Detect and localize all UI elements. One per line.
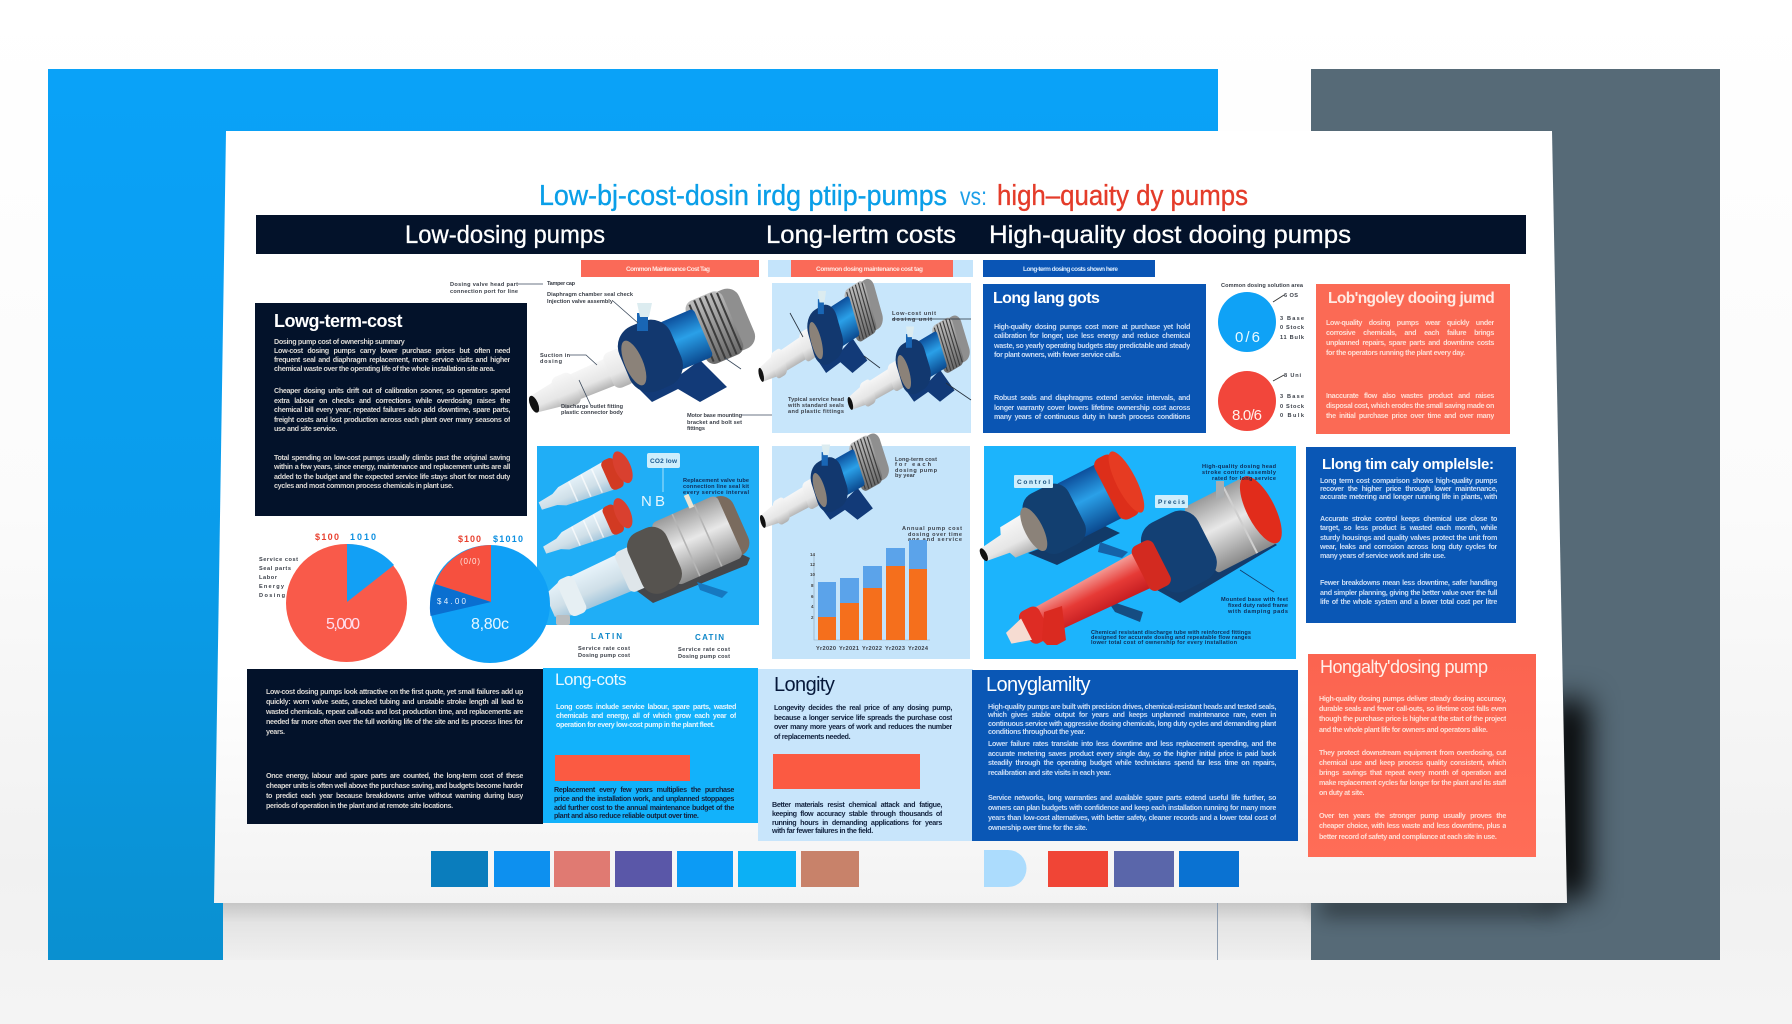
labels under silver pump panel: CATIN (695, 633, 724, 642)
paragraph: Low-quality dosing pumps wear quickly under corrosive chemicals, and each failure brings unplanned repairs, spare parts and downtime costs for the operators running the plant every day. (1326, 318, 1494, 357)
illustration: glass nozzles and silver pump panel: NB (641, 493, 665, 510)
paragraph: Cheaper dosing units drift out of calibration sooner, so operators spend extra labour on checks and corrections while overdosing raises the chemical bill every year; repeated failures also add downtime, spare parts, freight costs and lost production across each plant over many seasons of use and site service. (274, 386, 510, 433)
paragraph: Low-cost dosing pumps look attractive on the first quote, yet small failures add up quickly: worn valve seats, cracked tubing and unstable stroke length all lead to wasted chemicals, repeat call-outs and lost production time, and replacements are needed far more often over the full working life of the site and its process lines for years. (266, 687, 523, 736)
silver pump base (633, 552, 750, 603)
illustration: low-cost pump with callouts (450, 281, 772, 439)
illustration: big high-quality pump panel: Control (1017, 479, 1050, 486)
illustration: glass nozzles and silver pump panel: every service interval (683, 490, 749, 496)
silver pump leg (697, 582, 728, 598)
bar chart: 2 (811, 615, 814, 620)
paragraph: High-quality dosing pumps cost more at purchase yet hold calibration for longer, use less energy and reduce chemical waste, so yearly operating budgets stay predictable and steady for plant owners, with fewer service calls. (994, 322, 1190, 359)
title: high-quality part: high–quaity dy pumps (997, 180, 1248, 212)
labels under silver pump panel: LATIN (591, 632, 622, 641)
paragraph: Over ten years the stronger pump usually proves the cheaper choice, with less waste and less downtime, plus a better record of safety and compliance at each site in use. (1319, 811, 1506, 841)
bar chart: 6 (811, 594, 814, 599)
illustration: glass nozzles and silver pump panel: Replacement valve tube (683, 478, 749, 484)
paragraph: Better materials resist chemical attack and fatigue, keeping flow accuracy stable through thousands of running hours in demanding applications for years with far fewer failures in the field. (772, 801, 942, 835)
pie chart: low-cost pump (259, 532, 407, 662)
pie chart: low-cost pump: Seal parts (259, 566, 291, 572)
panel heading: Llong tim caly omplelsle: (1322, 456, 1494, 473)
paragraph: Lower failure rates translate into less downtime and less replacement spending, and the accurate metering saves product every single day, so the higher initial price is paid back steadily through the operating budget while technicians spend far less time on repairs, recalibration and site visits in each year. (988, 739, 1276, 777)
paragraph: Accurate stroke control keeps chemical use close to target, so less product is wasted each month, while sturdy housings and quality valves protect the unit from wear, leaks and corrosion across long duty cycles for many years of service work and site use. (1320, 514, 1497, 560)
illustration: twin pump panel: with standard seals (787, 403, 844, 409)
chart: blue and red circle comparison: 0 Stock (1280, 325, 1305, 331)
panel heading: Lob'ngoley dooing jumd (1328, 290, 1494, 307)
illustration: glass nozzles and silver pump panel (531, 446, 759, 637)
bar chart: 14 (810, 552, 816, 557)
white sheet (214, 131, 1567, 903)
panel heading: Lowg-term-cost (274, 311, 402, 331)
silver pump elbow (556, 615, 570, 625)
labels under silver pump panel (578, 632, 730, 660)
tag: light and red tag: Common dosing maintenance cost tag (816, 266, 923, 273)
paragraph: Once energy, labour and spare parts are counted, the long-term cost of these cheaper units is often well above the purchase saving, and budgets become harder to predict each year because breakdowns arrive without warning during busy periods of operation in the plant and at remote site locations. (266, 771, 523, 810)
panel: cyan long costs (543, 668, 758, 823)
chart: blue and red circle comparison: 0 Stock (1280, 404, 1305, 410)
illustration: big high-quality pump panel: stroke control assembly (1202, 470, 1277, 476)
chart: blue and red circle comparison: 0/6 (1235, 329, 1260, 346)
illustration: low-cost pump with callouts: connection port for line (450, 289, 518, 295)
paragraph: Long costs include service labour, spare parts, wasted chemicals and energy, all of which grow each year of operation for every low-cost pump in the plant fleet. (556, 702, 736, 729)
title (539, 180, 1248, 212)
bar chart: Yr2023 (885, 646, 905, 652)
bar chart: Yr2021 (839, 646, 859, 652)
panel: high quality comparison text (1306, 447, 1516, 623)
tag: red low-cost tag: Common Maintenance Cost Tag (626, 266, 710, 273)
panel: low-cost long-term cost text (255, 303, 527, 516)
header label: low-cost column: Low-dosing pumps (405, 221, 605, 249)
illustration: big high-quality pump panel: High-quality dosing head (1202, 464, 1277, 470)
tag: blue tag (983, 260, 1155, 277)
panel heading: Long lang gots (993, 290, 1099, 307)
panel: light longevity (758, 669, 973, 841)
illustration: big high-quality pump panel (966, 446, 1296, 672)
background: lower shelf under the sheet (223, 903, 1311, 960)
labels under silver pump panel: Service rate cost (678, 647, 730, 653)
paragraph: They protect downstream equipment from overdosing, cut chemical use and keep process quality consistent, which brings savings that repeat every month of operation and make replacement cycles far longer for the plant and its staff on duty at site. (1319, 748, 1506, 797)
illustration: twin pump panel: Low-cost unit (892, 311, 936, 317)
panel: pump and bar chart: Long-term cost (895, 457, 937, 463)
illustration: low-cost pump with callouts: Diaphragm chamber seal check (547, 292, 634, 298)
bar chart: Yr2020 (816, 646, 836, 652)
pie labels: $100 (315, 532, 339, 542)
bar chart: dosing over time (908, 532, 962, 538)
illustration: low-cost pump with callouts: fittings (687, 426, 705, 432)
labels under silver pump panel: Dosing pump cost (678, 654, 730, 660)
panel: pump and bar chart: dosing pump (895, 468, 938, 474)
chart: blue and red circle comparison (1218, 283, 1305, 431)
illustration: twin pump panel: dosing unit (892, 317, 932, 323)
illustration: big high-quality pump panel: lower total cost of ownership for every installation (1091, 640, 1238, 646)
illustration: twin pump panel: and plastic fittings (788, 409, 844, 415)
panel: blue longevity and quality text (972, 670, 1298, 841)
panel heading: Longity (774, 674, 834, 696)
header label: high-quality column: High-quality dost dooing pumps (989, 221, 1351, 249)
labels under silver pump panel: Dosing pump cost (578, 653, 630, 659)
illustration: big high-quality pump panel: Chemical resistant discharge tube with reinforced fittings (1091, 630, 1251, 636)
paragraph: Longevity decides the real price of any dosing pump, because a longer service life spreads the purchase cost over many more years of work and reduces the number of replacements needed. (774, 703, 952, 740)
sheet shadow (1550, 700, 1588, 898)
tag: light and red tag (768, 260, 973, 277)
pie chart: low-cost pump: Energy (259, 584, 285, 590)
slate shadow below sheet (1320, 896, 1560, 916)
paragraph: Low-cost dosing pumps carry lower purchase prices but often need frequent seal and diaphragm replacement, more service visits and higher chemical waste over the operating life of the whole installation site area. (274, 346, 510, 373)
red elbow (1042, 606, 1066, 645)
panel: pump and bar chart: by year (895, 473, 916, 479)
panel heading: Long-cots (555, 670, 626, 689)
pie chart: low-cost pump: Dosing (259, 593, 286, 599)
header bar (256, 215, 1526, 254)
pie chart: high-quality pump: 8,80c (471, 616, 509, 633)
illustration: big high-quality pump panel: fixed duty rated frame (1228, 603, 1288, 609)
red circle (1218, 371, 1276, 431)
bar chart: 4 (811, 604, 814, 609)
pie chart: high-quality pump: $1010 (493, 534, 523, 544)
labels under silver pump panel: Service rate cost (578, 646, 630, 652)
tag: red low-cost tag (581, 260, 759, 277)
blue pump leg (1098, 542, 1128, 558)
chart: blue and red circle comparison: 11 Bulk (1280, 335, 1305, 341)
bar chart (810, 526, 962, 652)
chart: blue and red circle comparison: Common dosing solution area (1221, 283, 1304, 289)
red nozzle silver pump (991, 470, 1291, 672)
chart: blue and red circle comparison: 6 OS (1284, 293, 1298, 299)
silver pump base (1148, 538, 1277, 603)
title: vs: vs: (960, 183, 987, 211)
paragraph: Replacement every few years multiplies the purchase price and the installation work, and unplanned stoppages add further cost to the annual maintenance budget of the plant and also reduce reliable output over time. (554, 786, 734, 820)
illustration: low-cost pump with callouts: Tamper cap (547, 281, 576, 287)
silver pump body (531, 479, 755, 637)
panel: high-quality long cost text (983, 284, 1206, 433)
illustration: low-cost pump with callouts: Suction in (540, 353, 571, 359)
panel: dark low-cost summary text (247, 669, 543, 824)
illustration: glass nozzles and silver pump panel: CO2 low (650, 458, 678, 465)
chart: blue and red circle comparison: 3 Base (1280, 316, 1304, 322)
bar chart: 10 (810, 572, 816, 577)
illustration: low-cost pump with callouts: Injection valve assembly (547, 299, 614, 305)
illustration: low-cost pump with callouts: Motor base mounting (687, 413, 743, 419)
bar chart: Yr2022 (862, 646, 882, 652)
pie chart: high-quality pump (430, 534, 550, 663)
bar chart: age and service (908, 537, 962, 543)
tag: blue tag: Long-term dosing costs shown here (1023, 266, 1118, 273)
blue pump base (1028, 525, 1120, 565)
chart: blue and red circle comparison: 3 Base (1280, 394, 1304, 400)
sub heading: Dosing pump cost of ownership summary (274, 337, 404, 346)
pie chart: low-cost pump: Labor (259, 575, 278, 581)
illustration: low-cost pump with callouts: dosing (540, 359, 563, 365)
illustration: twin pump panel: Typical service head (788, 397, 845, 403)
illustration: low-cost pump with callouts: Dosing valve head part (450, 282, 518, 288)
illustration: low-cost pump with callouts: bracket and bolt set (687, 420, 742, 426)
illustration: big high-quality pump panel: rated for long service (1212, 476, 1276, 482)
paragraph: High-quality pumps are built with precision drives, chemical-resistant heads and tested seals, which gives stable output for years and keeps unplanned maintenance rare, even in continuous service with aggressive dosing chemicals, long duty cycles and demanding plant conditions throughout the year. (988, 703, 1276, 736)
pie chart: high-quality pump: (0/0) (460, 557, 480, 566)
red bar (773, 754, 920, 789)
illustration: big high-quality pump panel: Mounted base with feet (1221, 597, 1288, 603)
legend swatches (431, 850, 1239, 887)
paragraph: Service networks, long warranties and available spare parts extend useful life further, so owners can plan budgets with confidence and keep each installation running for many more years than low-cost alternatives, with better safety, cleaner records and a lower total cost of ownership over time for the site. (988, 793, 1276, 832)
background: slate block (1311, 69, 1720, 960)
panel heading: Lonyglamilty (986, 674, 1090, 696)
panel: coral low-quality dosing pump text (1316, 284, 1510, 434)
illustration: low-cost pump with callouts: plastic connector body (561, 410, 624, 416)
blue pump with red cap (966, 447, 1151, 586)
panel: coral high-quality dosing pump text (1308, 654, 1536, 857)
pie chart: low-cost pump: 5,000 (326, 616, 360, 633)
illustration: big high-quality pump panel: with damping pads (1227, 609, 1288, 615)
bar chart: 12 (810, 562, 816, 567)
header label: long-term costs column: Long-lertm costs (766, 221, 956, 249)
panel heading: Hongalty'dosing pump (1320, 657, 1488, 677)
panel: pump and bar chart (753, 429, 970, 659)
pie chart: low-cost pump: 1010 (350, 532, 376, 542)
background: blue block (48, 69, 1218, 960)
blue circle (1218, 292, 1276, 352)
bar chart: Yr2024 (908, 646, 929, 652)
chart: blue and red circle comparison: 0 Bulk (1280, 413, 1305, 419)
panel: pump and bar chart: for each (895, 462, 932, 468)
illustration: glass nozzles and silver pump panel: connection line seal kit (683, 484, 749, 490)
paragraph: Total spending on low-cost pumps usually climbs past the original saving within a few years, since energy, maintenance and replacement units are all added to the budget and the expected service life stays short for most duty cycles and most common process chemicals in plant use. (274, 453, 510, 490)
pie chart: high-quality pump: $4.00 (437, 597, 467, 606)
background: shelf divider (1217, 903, 1218, 960)
paragraph: High-quality dosing pumps deliver steady dosing accuracy, durable seals and fewer call-outs, so lifetime cost falls even though the purchase price is higher at the start of the project and the whole plant life for owners and operators alike. (1319, 694, 1506, 734)
illustration: low-cost pump with callouts: Discharge outlet fitting (561, 404, 624, 410)
illustration: big high-quality pump panel: Precis (1158, 499, 1185, 506)
pie chart: low-cost pump: Service cost (259, 557, 298, 563)
illustration: twin pump panel (752, 274, 973, 433)
silver pump leg (1107, 600, 1143, 622)
pie labels: $100 (458, 534, 481, 544)
chart: blue and red circle comparison: 8 Uni (1284, 373, 1301, 379)
illustration: big high-quality pump panel: designed for accurate dosing and repeatable flow ranges (1091, 635, 1251, 641)
bar chart: Annual pump cost (902, 526, 962, 532)
bar chart: 8 (811, 583, 814, 588)
red bar (555, 755, 690, 781)
chart: blue and red circle comparison: 8.0/6 (1232, 407, 1262, 424)
title: low-cost part: Low-bj-cost-dosin irdg ptiip-pumps (539, 180, 947, 212)
